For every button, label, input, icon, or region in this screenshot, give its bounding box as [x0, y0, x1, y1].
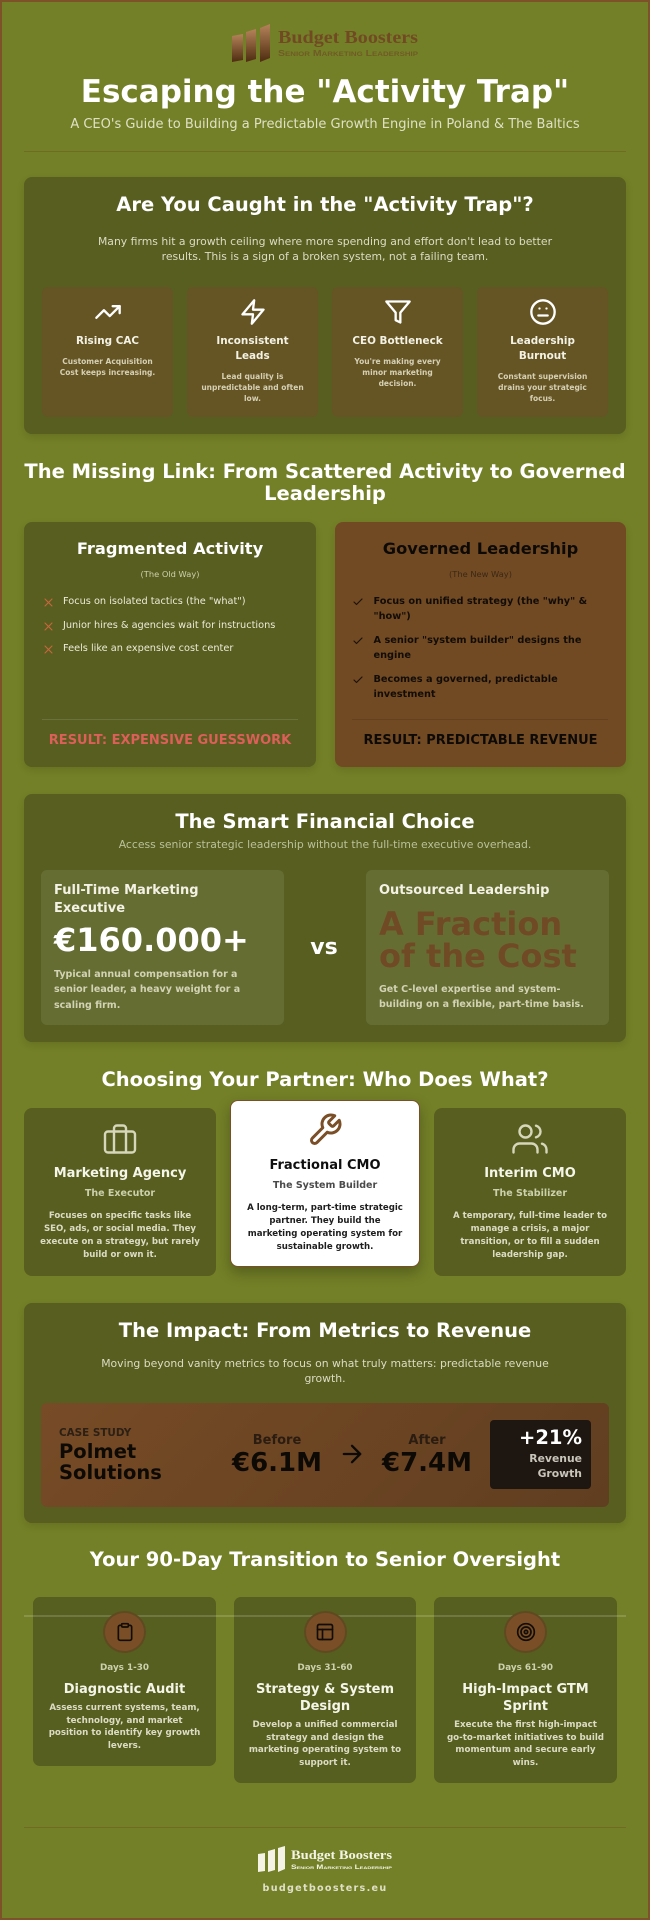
symptom: leadership burnout: [477, 287, 608, 417]
item: [374, 634, 581, 661]
card text: transition, or to fill a sudden: [460, 1236, 600, 1246]
card: interim cmo: [434, 1108, 626, 1276]
card text: building on a flexible, part-time basis.: [379, 999, 584, 1010]
after number: €7.4M: [382, 1448, 472, 1478]
icon: layout: [315, 1622, 335, 1642]
panel subtitle: (The Old Way): [141, 569, 199, 579]
card title: [54, 883, 199, 916]
card text: Typical annual compensation for a: [54, 969, 237, 980]
panel: governed leadership: [335, 522, 626, 767]
icon: trending up: [95, 304, 121, 320]
card text: execute on a strategy, but rarely: [40, 1236, 200, 1246]
card text: Focuses on specific tasks like: [49, 1210, 191, 1220]
symptom: ceo bottleneck: [332, 287, 463, 417]
item: A senior "system builder" designs the: [374, 634, 581, 646]
symptom text: Constant supervision: [498, 372, 587, 381]
symptom text: decision.: [379, 379, 416, 388]
icon: check: [354, 598, 362, 605]
step title: [434, 1680, 617, 1714]
card text: scaling firm.: [54, 1000, 120, 1011]
card title: Outsourced Leadership: [379, 883, 549, 898]
item: [374, 674, 558, 700]
item: [374, 596, 587, 622]
icon: neutral face: [530, 299, 556, 325]
client name: [59, 1440, 162, 1484]
step circle: [103, 1611, 146, 1653]
icon: briefcase: [104, 1124, 136, 1154]
symptom text: Cost keeps increasing.: [60, 368, 155, 377]
heading: transition: Your 90-Day Transition to Senior Oversight: [90, 1548, 560, 1570]
card role: The System Builder: [273, 1180, 377, 1191]
item: engine: [374, 650, 411, 661]
step circle: [304, 1611, 346, 1653]
symptom: rising cac: [42, 287, 173, 417]
symptom text: unpredictable and often: [201, 383, 304, 392]
list: [354, 596, 587, 700]
card title: Interim CMO: [484, 1166, 576, 1181]
header logo: Budget Boosters: [278, 27, 418, 47]
card title: Marketing Agency: [54, 1166, 186, 1181]
footer logo: Senior Marketing Leadership: [291, 1865, 392, 1871]
step text: Develop a unified commercial: [252, 1720, 398, 1730]
step title: Design: [300, 1698, 350, 1714]
card text: [247, 1202, 403, 1252]
symptom text: You're making every: [354, 357, 441, 366]
symptom text: focus.: [530, 394, 555, 403]
card text: A long-term, part-time strategic: [247, 1202, 403, 1212]
card text: Get C-level expertise and system-: [379, 984, 560, 995]
big statement: A Fraction: [379, 905, 562, 943]
arrow: [342, 1444, 362, 1464]
card text: senior leader, a heavy weight for a: [54, 984, 240, 995]
card: marketing agency: [24, 1108, 216, 1276]
vs label: vs: [310, 934, 338, 960]
symptom text: [201, 372, 304, 403]
card title: Fractional CMO: [269, 1158, 381, 1173]
card title: Full-Time Marketing: [54, 883, 199, 898]
card: days 61-90: [434, 1597, 617, 1783]
icon: clipboard: [114, 1622, 134, 1642]
panel: fragmented activity: [24, 522, 316, 767]
step text: momentum and secure early: [455, 1745, 596, 1755]
before value: [232, 1433, 322, 1478]
list: [44, 596, 275, 654]
symptom title: Rising CAC: [76, 334, 139, 346]
item: Feels like an expensive cost center: [63, 642, 233, 654]
step text: [33, 1702, 216, 1753]
step days: Days 1-30: [100, 1662, 149, 1672]
symptom title: [510, 334, 575, 362]
card text: [453, 1210, 607, 1260]
intro text: growth.: [304, 1372, 346, 1385]
heading: The Impact: From Metrics to Revenue: [119, 1318, 531, 1342]
icon: cross: [44, 598, 52, 606]
step text: strategy and design the: [266, 1732, 384, 1742]
step title: High-Impact GTM: [462, 1682, 589, 1696]
item: Junior hires & agencies wait for instructions: [63, 620, 275, 630]
card: full-time executive: [41, 870, 284, 1025]
symptom title: Leadership: [510, 334, 575, 346]
heading: missing link: The Missing Link: From Scattered Activity to Governed: [24, 460, 626, 483]
big statement: [379, 905, 577, 975]
symptom title: Leads: [235, 350, 270, 362]
result: RESULT: EXPENSIVE GUESSWORK: [49, 733, 291, 748]
before label: Before: [253, 1433, 301, 1448]
step text: Execute the first high-impact: [454, 1720, 597, 1730]
card role: The Stabilizer: [493, 1188, 567, 1199]
heading: partners: Choosing Your Partner: Who Does What?: [101, 1068, 549, 1090]
after value: [382, 1433, 472, 1478]
growth label: Revenue: [529, 1452, 582, 1464]
card: outsourced leadership: [366, 870, 609, 1025]
panel title: Governed Leadership: [383, 538, 578, 558]
header logo: Senior Marketing Leadership: [278, 49, 418, 58]
icon: users: [512, 1124, 548, 1154]
card: days 1-30: [33, 1597, 216, 1766]
step title: Diagnostic Audit: [64, 1682, 185, 1696]
step title: Strategy & System: [256, 1682, 394, 1696]
card text: SEO, ads, or social media. They: [44, 1224, 196, 1234]
icon: cross: [44, 646, 52, 654]
step days: Days 61-90: [498, 1662, 553, 1672]
panel subtitle: (The New Way): [449, 569, 512, 579]
symptom title: Inconsistent: [216, 334, 289, 346]
step days: Days 31-60: [297, 1662, 353, 1672]
card text: [379, 984, 584, 1010]
item: investment: [374, 689, 436, 700]
growth label: [529, 1452, 582, 1480]
step text: Assess current systems, team,: [49, 1703, 200, 1713]
footer logo: Budget Boosters: [291, 1847, 392, 1862]
card title: Executive: [54, 901, 125, 916]
card text: [54, 969, 240, 1011]
step text: levers.: [108, 1741, 141, 1751]
heading: Are You Caught in the "Activity Trap"?: [116, 193, 534, 216]
panel: impact: [24, 1303, 626, 1523]
card text: sustainable growth.: [277, 1242, 373, 1252]
heading: missing link: Leadership: [264, 482, 386, 504]
symptom text: [60, 357, 155, 377]
panel: activity trap: [24, 177, 626, 434]
card: fractional cmo: [230, 1100, 420, 1267]
card text: manage a crisis, a major: [471, 1224, 589, 1234]
subtitle: A CEO's Guide to Building a Predictable Growth Engine in Poland & The Baltics: [70, 116, 580, 132]
panel: financial choice: [24, 794, 626, 1042]
symptom text: drains your strategic: [498, 383, 587, 392]
card text: partner. They build the: [269, 1216, 381, 1226]
item: Becomes a governed, predictable: [374, 674, 558, 684]
intro text: Moving beyond vanity metrics to focus on what truly matters: predictable revenue: [101, 1356, 549, 1370]
case label: CASE STUDY: [59, 1427, 131, 1439]
step circle: [504, 1611, 547, 1653]
result: RESULT: PREDICTABLE REVENUE: [363, 733, 598, 748]
panel title: Fragmented Activity: [77, 538, 263, 558]
step title: [234, 1680, 416, 1714]
step text: position to identify key growth: [49, 1728, 200, 1738]
footer logo: [258, 1845, 394, 1873]
case study banner: [41, 1403, 609, 1507]
symptom text: minor marketing: [362, 368, 433, 377]
symptom text: [498, 372, 587, 403]
big statement: of the Cost: [379, 937, 577, 975]
step text: [434, 1719, 617, 1770]
step title: Sprint: [503, 1698, 548, 1714]
icon: target: [516, 1622, 536, 1642]
symptom: inconsistent leads: [187, 287, 318, 417]
card text: marketing operating system for: [248, 1228, 402, 1238]
step text: [234, 1719, 416, 1770]
card text: A temporary, full-time leader to: [453, 1210, 607, 1220]
intro text: results. This is a sign of a broken system, not a failing team.: [162, 250, 488, 263]
growth number: +21%: [519, 1426, 582, 1449]
item: Focus on isolated tactics (the "what"): [63, 596, 246, 606]
growth box: [490, 1420, 591, 1489]
header logo: [232, 24, 418, 62]
title: Escaping the "Activity Trap": [81, 74, 569, 110]
before number: €6.1M: [232, 1448, 322, 1478]
footer url: budgetboosters.eu: [263, 1883, 387, 1894]
icon: wrench: [310, 1114, 342, 1145]
heading: missing link: [24, 460, 626, 504]
symptom text: Lead quality is: [222, 372, 283, 381]
subheading: Access senior strategic leadership without the full-time executive overhead.: [119, 838, 531, 851]
after label: After: [408, 1433, 446, 1448]
heading: The Smart Financial Choice: [175, 810, 475, 833]
client name: Polmet: [59, 1440, 136, 1462]
step text: marketing operating system to: [249, 1745, 401, 1755]
symptom text: Customer Acquisition: [62, 357, 153, 366]
icon: cross: [44, 622, 52, 630]
symptom text: low.: [244, 394, 261, 403]
symptom text: [354, 357, 441, 388]
card role: The Executor: [85, 1188, 155, 1199]
step text: go-to-market initiatives to build: [447, 1732, 604, 1742]
icon: lightning: [241, 299, 265, 325]
growth label: Growth: [538, 1466, 582, 1480]
item: "how"): [374, 611, 411, 622]
symptom title: [216, 334, 289, 362]
card text: [40, 1210, 200, 1260]
client name: Solutions: [59, 1461, 162, 1484]
step text: technology, and market: [66, 1716, 183, 1726]
card text: leadership gap.: [492, 1250, 568, 1260]
icon: check: [354, 676, 362, 683]
icon: check: [354, 638, 362, 644]
step text: wins.: [513, 1758, 538, 1768]
item: Focus on unified strategy (the "why" &: [374, 596, 587, 606]
intro text: [101, 1356, 549, 1385]
card text: build or own it.: [83, 1250, 157, 1260]
card: days 31-60: [234, 1597, 416, 1783]
icon: funnel: [385, 300, 411, 324]
intro text: Many firms hit a growth ceiling where more spending and effort don't lead to better: [98, 235, 552, 248]
symptom title: Burnout: [519, 350, 566, 362]
price: €160.000+: [54, 921, 249, 959]
step text: support it.: [299, 1758, 351, 1768]
symptom title: CEO Bottleneck: [352, 334, 443, 346]
intro text: [98, 235, 552, 263]
